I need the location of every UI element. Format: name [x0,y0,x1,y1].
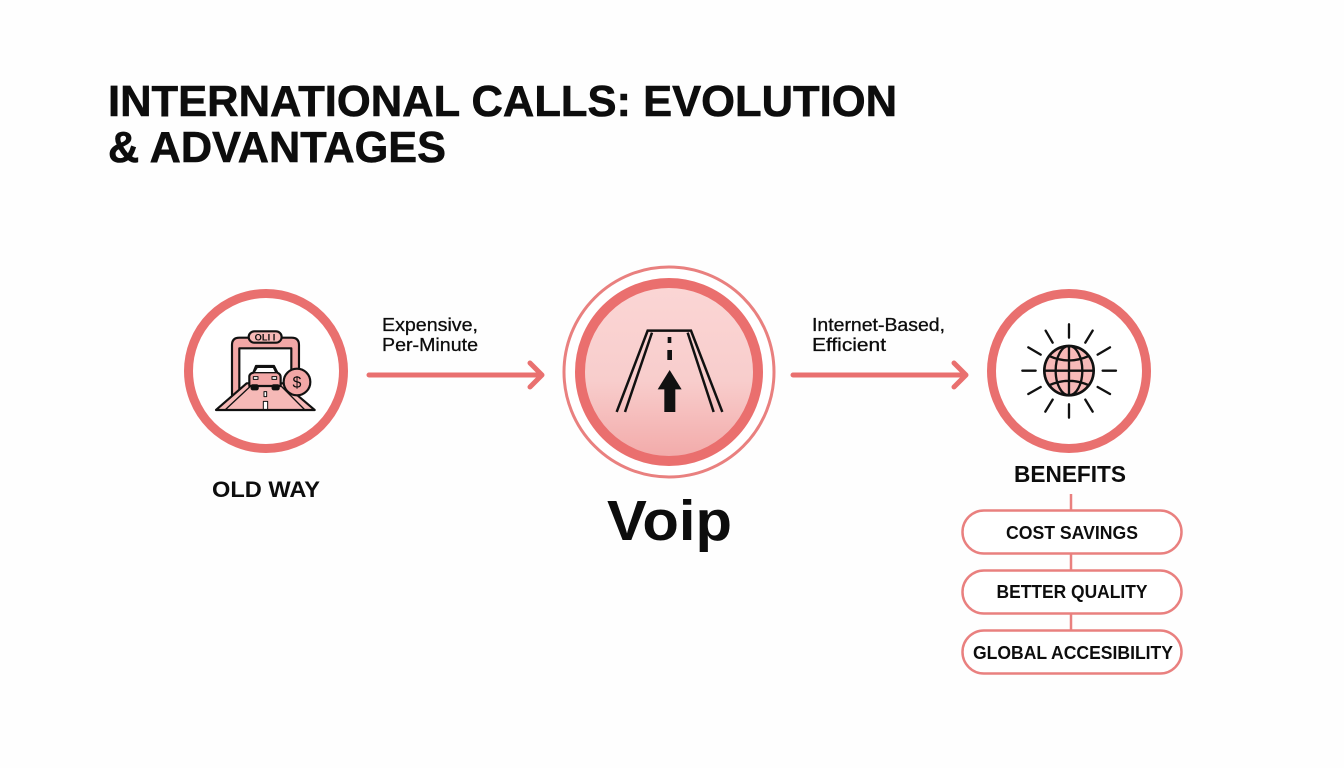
label: internet-based efficient: Efficient [812,335,886,355]
label: old way: OLD WAY [212,477,320,502]
icon: road with arrow [617,331,722,412]
icon: benefits ring [992,294,1146,448]
label: internet-based efficient [812,315,945,355]
pill: cost savings: COST SAVINGS [1006,523,1138,543]
icon: voip disc [580,283,758,461]
icon: toll booth with car: OLI I [255,333,275,343]
pill: cost savings [962,510,1182,554]
title [108,78,897,172]
panel: old way [188,294,344,502]
panel: benefits [962,294,1182,674]
pill: better quality: BETTER QUALITY [996,582,1148,602]
icon: globe with rays [1022,324,1116,418]
label: expensive per-minute [382,315,478,355]
icon: old way ring [188,294,344,448]
title: & ADVANTAGES [108,124,446,172]
pill: global accesibility: GLOBAL ACCESIBILITY [973,643,1173,663]
icon: voip outer ring [564,267,774,477]
label: expensive per-minute: Per-Minute [382,335,478,355]
label: expensive per-minute: Expensive, [382,315,478,335]
label: internet-based efficient: Internet-Based, [812,315,945,335]
pill: global accesibility [962,630,1182,674]
icon: toll booth with car [216,331,315,410]
icon: toll booth with car: $ [293,375,302,392]
label: benefits: BENEFITS [1014,461,1126,487]
arrow: voip to benefits [793,363,966,387]
title: INTERNATIONAL CALLS: EVOLUTION [108,78,897,126]
pill: better quality [962,570,1182,614]
connector lines [1070,494,1072,630]
arrow: old way to voip [369,363,542,387]
panel: voip [564,267,774,553]
label: voip: Voip [607,489,732,553]
